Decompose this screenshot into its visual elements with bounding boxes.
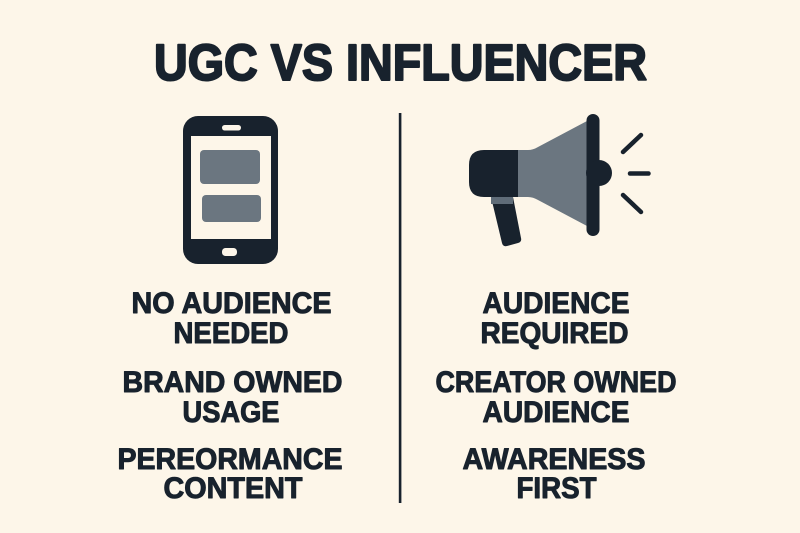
- point: performance content: CONTENT: [164, 472, 302, 505]
- point: no audience needed: NEEDED: [174, 317, 288, 350]
- point: audience required: REQUIRED: [480, 317, 628, 350]
- icon: sound waves: [623, 135, 648, 212]
- icon: megaphone: [469, 114, 648, 246]
- point: audience required: [480, 287, 630, 350]
- point: performance content: [118, 443, 342, 505]
- column divider: [399, 113, 401, 503]
- point: awareness first: FIRST: [516, 472, 596, 505]
- left column: UGC points: [118, 287, 342, 505]
- point: creator owned audience: AUDIENCE: [482, 396, 630, 429]
- point: no audience needed: NO AUDIENCE: [132, 287, 332, 320]
- point: awareness first: AWARENESS: [462, 443, 646, 476]
- icon: smartphone: [183, 116, 278, 264]
- point: brand owned usage: [122, 366, 342, 429]
- right column: influencer points: [436, 287, 676, 505]
- point: creator owned audience: [436, 366, 676, 429]
- point: performance content: PEREORMANCE: [118, 443, 342, 476]
- point: awareness first: [462, 443, 646, 505]
- title: UGC VS INFLUENCER: [154, 34, 647, 91]
- point: creator owned audience: CREATOR OWNED: [436, 366, 676, 399]
- point: brand owned usage: BRAND OWNED: [122, 366, 342, 399]
- point: brand owned usage: USAGE: [182, 396, 280, 429]
- point: no audience needed: [132, 287, 332, 350]
- point: audience required: AUDIENCE: [482, 287, 630, 320]
